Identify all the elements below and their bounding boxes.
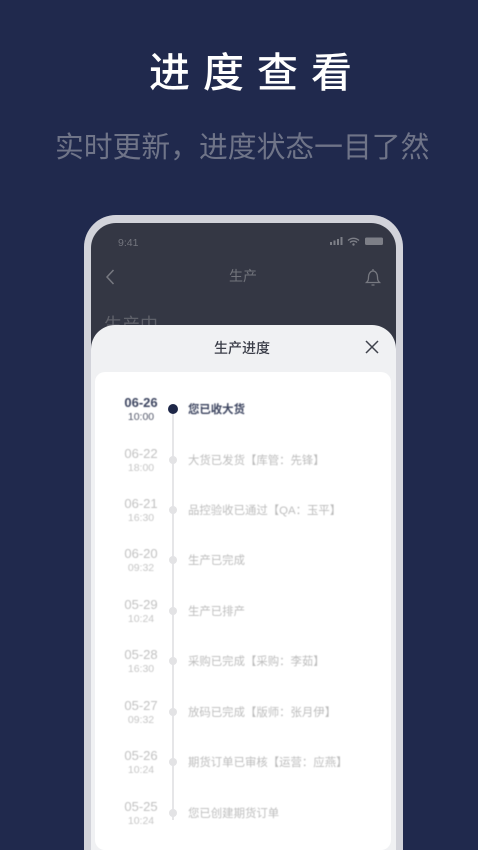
status heading: 生产中: [104, 315, 158, 335]
step 6: 采购已完成【采购：李茹】: [188, 656, 325, 668]
step 9: 您已创建期货订单: [188, 808, 279, 820]
step 8: 期货订单已审核【运营：应燕】: [188, 757, 347, 769]
step 1: 您已收大货: [188, 404, 245, 416]
status bar time: 9:41: [118, 237, 138, 249]
step 1: [124, 395, 246, 423]
subtitle: 实时更新，进度状态一目了然: [55, 132, 429, 164]
step 8: 10:24: [128, 764, 154, 776]
sheet title: 生产进度: [214, 340, 270, 356]
step 3: [124, 496, 341, 524]
bottom sheet: [91, 325, 396, 850]
step 4: 09:32: [128, 562, 154, 574]
step 2: 18:00: [128, 462, 154, 474]
step 2: 大货已发货【库管：先锋】: [188, 455, 325, 467]
step 5: 05-29: [124, 597, 158, 612]
close icon: [366, 340, 378, 354]
step 2: [124, 446, 325, 474]
back arrow: [106, 270, 114, 284]
step 5: 10:24: [128, 613, 154, 625]
step 2: 06-22: [124, 446, 158, 461]
step 5: 生产已排产: [188, 606, 245, 618]
step 5: [124, 597, 245, 625]
timeline line: [172, 409, 174, 820]
step 7: 09:32: [128, 714, 154, 726]
step 7: 05-27: [124, 698, 158, 713]
title: 进度查看: [149, 50, 365, 96]
step 8: 05-26: [124, 748, 158, 763]
step 6: 05-28: [124, 647, 158, 662]
step 1: 10:00: [128, 411, 154, 423]
nav title: 生产: [229, 268, 257, 284]
step 4: 06-20: [124, 546, 158, 561]
step 7: 放码已完成【版师：张月伊】: [188, 707, 336, 719]
step 7: [124, 698, 336, 726]
phone mockup: [84, 215, 403, 850]
step 3: 品控验收已通过【QA：玉平】: [188, 505, 341, 517]
bell icon: [365, 269, 381, 286]
status bar icons: [330, 237, 383, 246]
step 8: [124, 748, 347, 776]
step 9: 10:24: [128, 815, 154, 827]
step 6: 16:30: [128, 663, 154, 675]
step 4: [124, 546, 245, 574]
step 9: 05-25: [124, 799, 158, 814]
step 9: [124, 799, 279, 827]
step 6: [124, 647, 325, 675]
dimmed app screen: [91, 223, 396, 850]
step 1: 06-26: [124, 395, 158, 410]
step 4: 生产已完成: [188, 555, 245, 567]
timeline card: [95, 372, 391, 850]
step 3: 06-21: [124, 496, 158, 511]
step 3: 16:30: [128, 512, 154, 524]
